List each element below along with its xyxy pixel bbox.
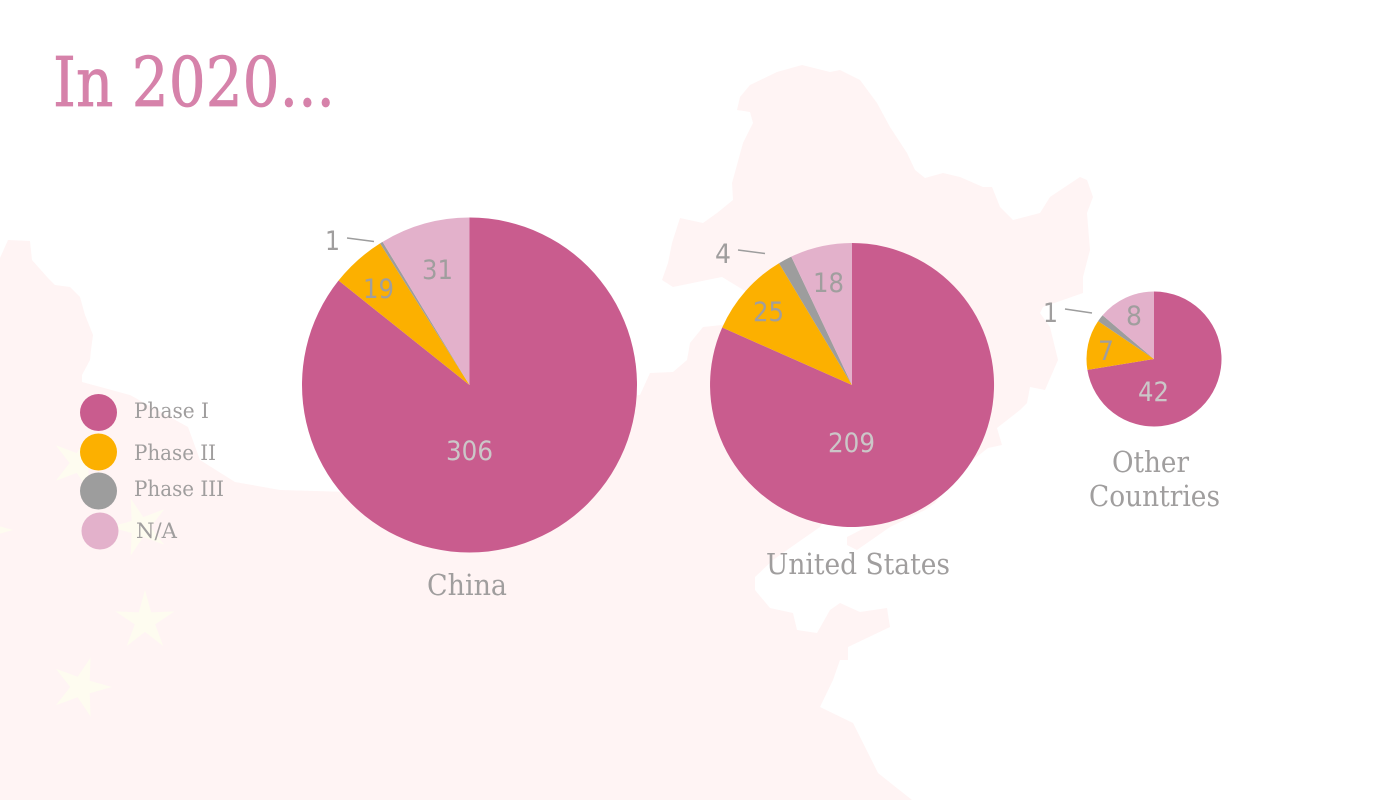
map silhouette <box>0 65 1093 800</box>
value 306: 306 <box>446 436 493 467</box>
value 1 with leader: 1 <box>1043 298 1058 329</box>
legend item: Phase III <box>80 472 224 510</box>
label Other Countries <box>1089 445 1220 513</box>
value 209: 209 <box>828 428 875 459</box>
value 8: 8 <box>1126 301 1142 332</box>
label China: China <box>427 568 507 602</box>
legend item: N/A: N/A <box>136 519 178 543</box>
slice: Phase I 209 <box>710 243 994 527</box>
value 7: 7 <box>1098 336 1114 367</box>
star 3 <box>116 590 174 646</box>
value 18: 18 <box>813 268 844 299</box>
value 4 with leader: 4 <box>715 239 731 270</box>
slice: Phase III 1 <box>380 242 470 385</box>
pie chart: China <box>302 218 637 602</box>
star 4 <box>56 658 112 716</box>
label United States: United States <box>766 547 950 581</box>
slice: Phase II 7 <box>1087 321 1154 370</box>
legend item: N/A <box>82 512 178 550</box>
slice: N/A 8 <box>1103 292 1154 359</box>
star 2 <box>110 498 164 556</box>
pie chart: United States <box>710 239 994 581</box>
legend <box>80 394 224 550</box>
label Other Countries: Other <box>1112 445 1189 479</box>
legend item: Phase I: Phase I <box>134 399 209 423</box>
slice: Phase III 4 <box>779 257 852 385</box>
value 1 with leader <box>1043 298 1092 329</box>
value 1 with leader <box>325 226 374 257</box>
slice: Phase II 25 <box>722 263 852 385</box>
value 31: 31 <box>422 255 453 286</box>
value 42: 42 <box>1138 377 1169 408</box>
title: In 2020... <box>53 44 335 123</box>
background map of China with flag stars <box>0 65 1093 800</box>
slice: N/A 18 <box>791 243 852 385</box>
slice: N/A 31 <box>383 218 470 385</box>
slice: Phase I 306 <box>302 218 637 552</box>
legend item: Phase III: Phase III <box>134 477 224 501</box>
pie chart: Other Countries <box>1043 292 1222 513</box>
value 25: 25 <box>753 297 784 328</box>
slice: Phase I 42 <box>1087 292 1222 427</box>
legend item: Phase I <box>80 394 209 431</box>
value 1 with leader: 1 <box>325 226 340 257</box>
legend item: Phase II: Phase II <box>134 441 216 465</box>
legend item: Phase II <box>80 434 216 470</box>
slice: Phase III 1 <box>1098 315 1154 359</box>
value 4 with leader <box>715 239 765 270</box>
slice: Phase II 19 <box>339 243 470 385</box>
star 5 <box>0 502 13 558</box>
star 1 <box>56 434 110 492</box>
value 19: 19 <box>363 274 394 305</box>
label Other Countries: Countries <box>1089 479 1220 513</box>
